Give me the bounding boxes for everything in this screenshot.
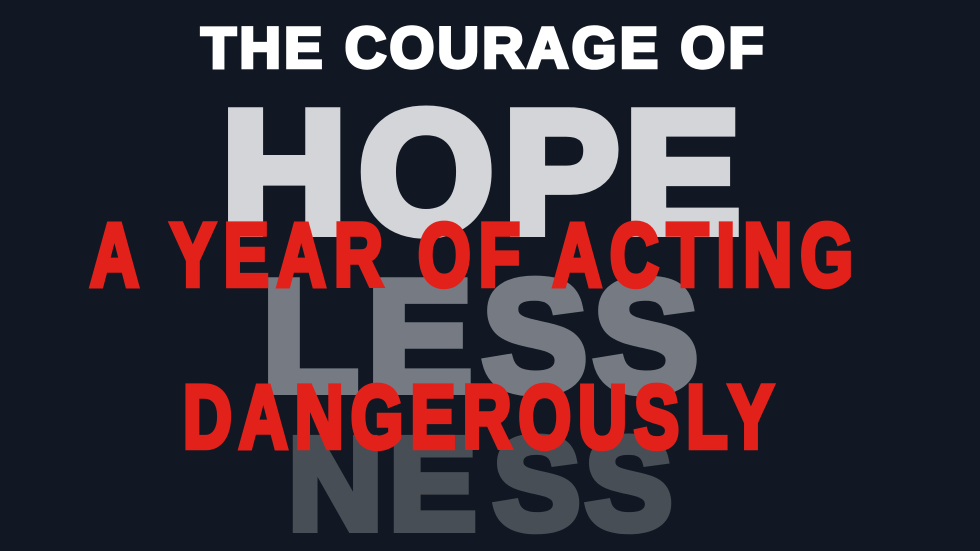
big word: hope: HOPE xyxy=(221,74,741,269)
title: the courage of: THE COURAGE OF xyxy=(201,16,764,80)
subtitle line: dangerously: DANGEROUSLY xyxy=(183,366,774,467)
subtitle line: a year of acting: A YEAR OF ACTING xyxy=(90,204,853,305)
big word: less: LESS xyxy=(262,248,698,424)
